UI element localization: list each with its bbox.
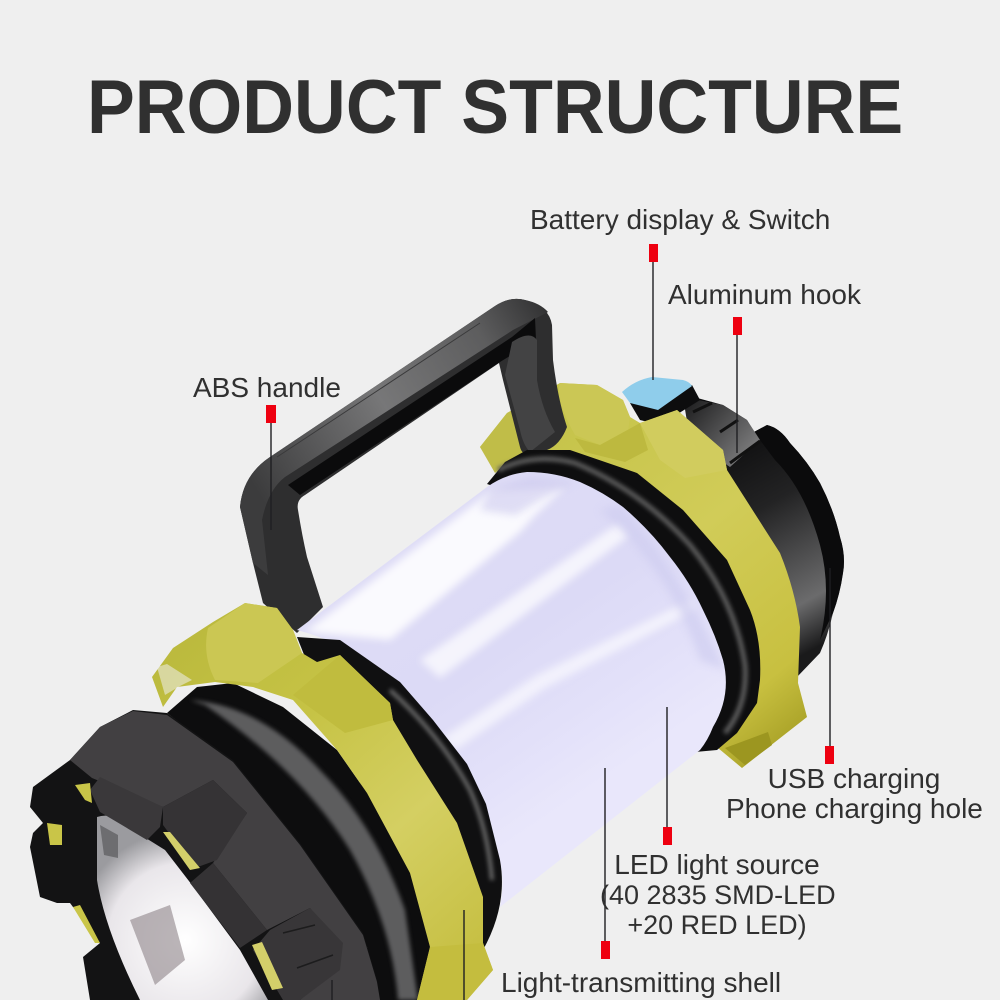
label: LED light source: (40 2835 SMD-LED <box>600 880 836 910</box>
switch button <box>622 377 700 425</box>
label: battery display: Battery display & Switch <box>530 204 830 235</box>
label: USB charging: Phone charging hole <box>726 793 983 824</box>
front yellow ring <box>152 603 493 1000</box>
lens <box>97 816 268 1000</box>
label: ABS handle: ABS handle <box>193 372 341 403</box>
front black ring <box>167 637 502 1000</box>
label: LED light source: LED light source <box>614 849 820 880</box>
front head <box>30 710 380 1000</box>
rear yellow ring <box>480 383 807 768</box>
label: USB charging <box>726 763 983 824</box>
rear black ring <box>487 450 760 752</box>
label: light-transmitting shell: Light-transmitting shell <box>501 967 781 998</box>
title: PRODUCT STRUCTURE <box>87 65 903 150</box>
handle <box>240 299 567 633</box>
lantern illustration <box>30 244 844 1000</box>
label: USB charging: USB charging <box>768 763 940 794</box>
callout markers <box>266 244 834 959</box>
label: aluminum hook: Aluminum hook <box>668 279 861 310</box>
callout leader lines <box>271 262 830 1000</box>
label: LED light source: +20 RED LED) <box>627 910 807 940</box>
label: LED light source <box>600 849 836 940</box>
rear head <box>683 396 844 677</box>
translucent lamp body <box>297 472 726 907</box>
